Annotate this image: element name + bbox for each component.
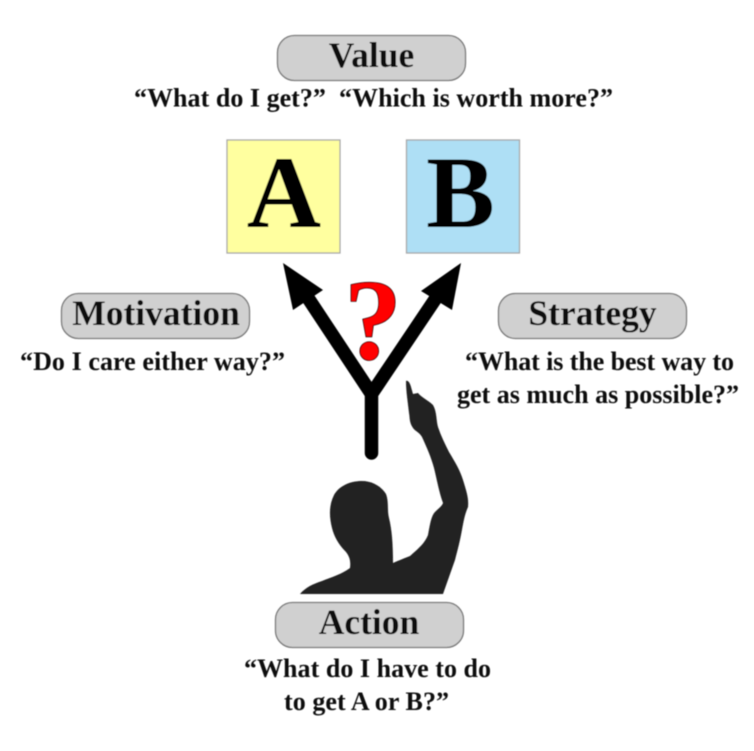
strategy question: get as much as possible?” xyxy=(457,380,739,409)
left arrowhead xyxy=(283,263,323,310)
action question: to get A or B?” xyxy=(284,687,449,716)
right arrowhead xyxy=(421,263,461,310)
value questions: “What do I get?” “Which is worth more?” xyxy=(134,84,613,112)
strategy question: “What is the best way to xyxy=(465,347,734,376)
action question: “What do I have to do xyxy=(244,654,491,683)
action pill xyxy=(276,602,464,648)
option box B xyxy=(406,136,520,253)
motivation pill xyxy=(62,294,250,338)
action heading: Action xyxy=(319,602,420,642)
panel: value xyxy=(134,35,613,112)
branching arrows xyxy=(283,263,461,453)
question mark: ? xyxy=(344,257,402,385)
motivation heading: Motivation xyxy=(72,293,240,333)
strategy pill xyxy=(498,294,686,338)
value heading: Value xyxy=(329,35,414,75)
panel: motivation xyxy=(20,293,285,376)
strategy heading: Strategy xyxy=(528,293,657,333)
motivation question: “Do I care either way?” xyxy=(20,347,285,376)
icon: person silhouette pointing xyxy=(300,381,468,594)
panel: strategy xyxy=(457,293,739,409)
option box B: B xyxy=(426,136,495,250)
option box A: A xyxy=(247,136,321,250)
value pill xyxy=(278,36,466,80)
option box A xyxy=(227,136,340,253)
panel: action xyxy=(244,602,491,716)
